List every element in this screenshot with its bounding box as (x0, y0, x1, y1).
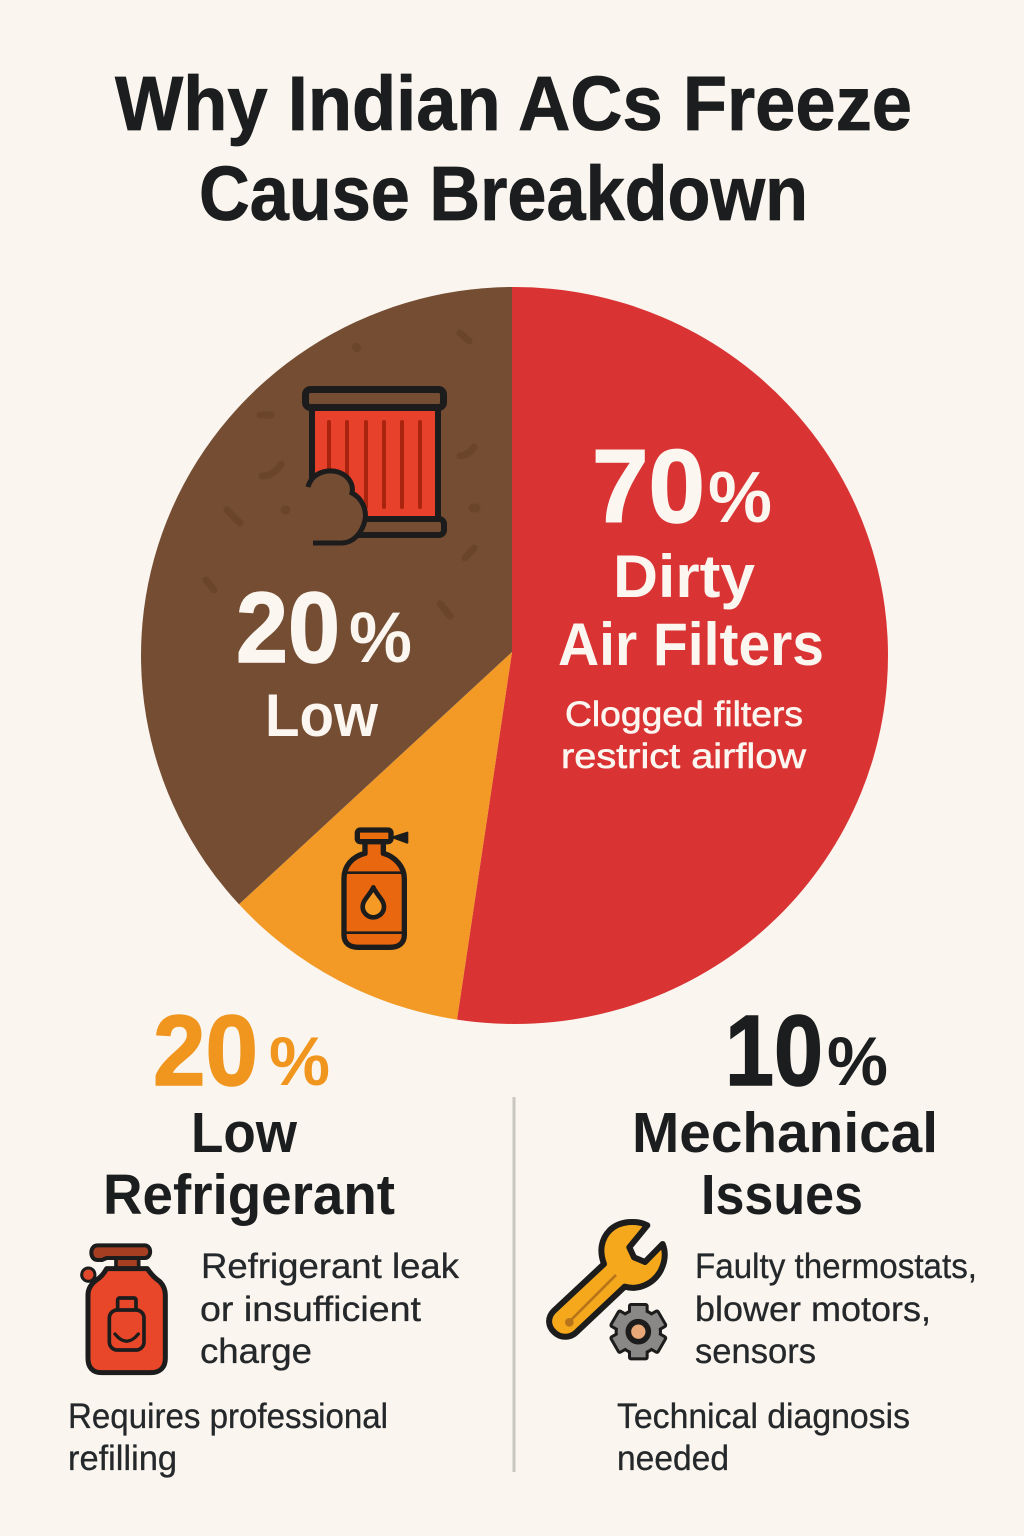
stat: 20%: % (269, 1023, 330, 1100)
label: 70% dirty air filters: 70 (592, 429, 705, 545)
text: refrigerant leak: or insufficient (200, 1290, 421, 1329)
text: faulty parts: blower motors, (695, 1290, 931, 1329)
label: 70% dirty air filters: % (708, 458, 772, 538)
label: 70% dirty air filters: Clogged filters (565, 695, 803, 734)
heading: low refrigerant (103, 1101, 395, 1227)
text: refrigerant leak: Refrigerant leak (201, 1247, 460, 1286)
label: 20% low: % (349, 599, 412, 678)
icon: dirty air filter (300, 390, 444, 543)
stat: 10% (725, 995, 888, 1107)
dust specks (206, 333, 476, 616)
heading: low refrigerant: Refrigerant (103, 1163, 395, 1227)
title (115, 61, 912, 237)
wrench (549, 1222, 665, 1337)
label: 70% dirty air filters: restrict airflow (561, 737, 807, 776)
panel: mechanical issues (549, 995, 977, 1478)
heading: mechanical issues: Mechanical (632, 1101, 938, 1165)
label: 20% low: Low (265, 682, 378, 749)
label: 70% dirty air filters (558, 429, 824, 776)
slice: dirty air filters (457, 287, 888, 1024)
text: faulty parts (695, 1247, 977, 1371)
icon: refrigerant tank (82, 1245, 165, 1373)
icon: refrigerant bottle (344, 830, 407, 947)
label: 70% dirty air filters: Dirty (613, 543, 756, 610)
label: 20% low: 20 (236, 572, 340, 684)
stat: 10%: 10 (725, 995, 823, 1107)
stat: 10%: % (827, 1023, 888, 1100)
stat: 20%: 20 (153, 995, 258, 1107)
title: Why Indian ACs Freeze (115, 61, 912, 147)
heading: mechanical issues (632, 1101, 938, 1227)
text: faulty parts: Faulty thermostats, (695, 1247, 977, 1286)
gear (612, 1306, 664, 1357)
slice: low, brown (141, 287, 512, 904)
text: requires professional refilling (68, 1397, 388, 1478)
label: 70% dirty air filters: Air Filters (558, 611, 824, 678)
text: refrigerant leak: charge (200, 1332, 312, 1371)
icon: wrench and gear (549, 1222, 665, 1357)
heading: low refrigerant: Low (191, 1101, 298, 1165)
title: Cause Breakdown (199, 151, 808, 237)
text: technical diagnosis needed: needed (617, 1439, 729, 1478)
text: requires professional refilling: Requires professional (68, 1397, 388, 1436)
text: requires professional refilling: refilling (68, 1439, 177, 1478)
text: refrigerant leak (200, 1247, 460, 1371)
text: technical diagnosis needed: Technical diagnosis (617, 1397, 910, 1436)
panel: low refrigerant (68, 995, 460, 1478)
slice: low refrigerant (239, 652, 512, 1020)
pie chart (141, 287, 888, 1024)
label: 20% low (236, 572, 412, 749)
text: technical diagnosis needed (617, 1397, 910, 1478)
stat: 20% (153, 995, 330, 1107)
text: faulty parts: sensors (695, 1332, 816, 1371)
heading: mechanical issues: Issues (701, 1163, 863, 1227)
